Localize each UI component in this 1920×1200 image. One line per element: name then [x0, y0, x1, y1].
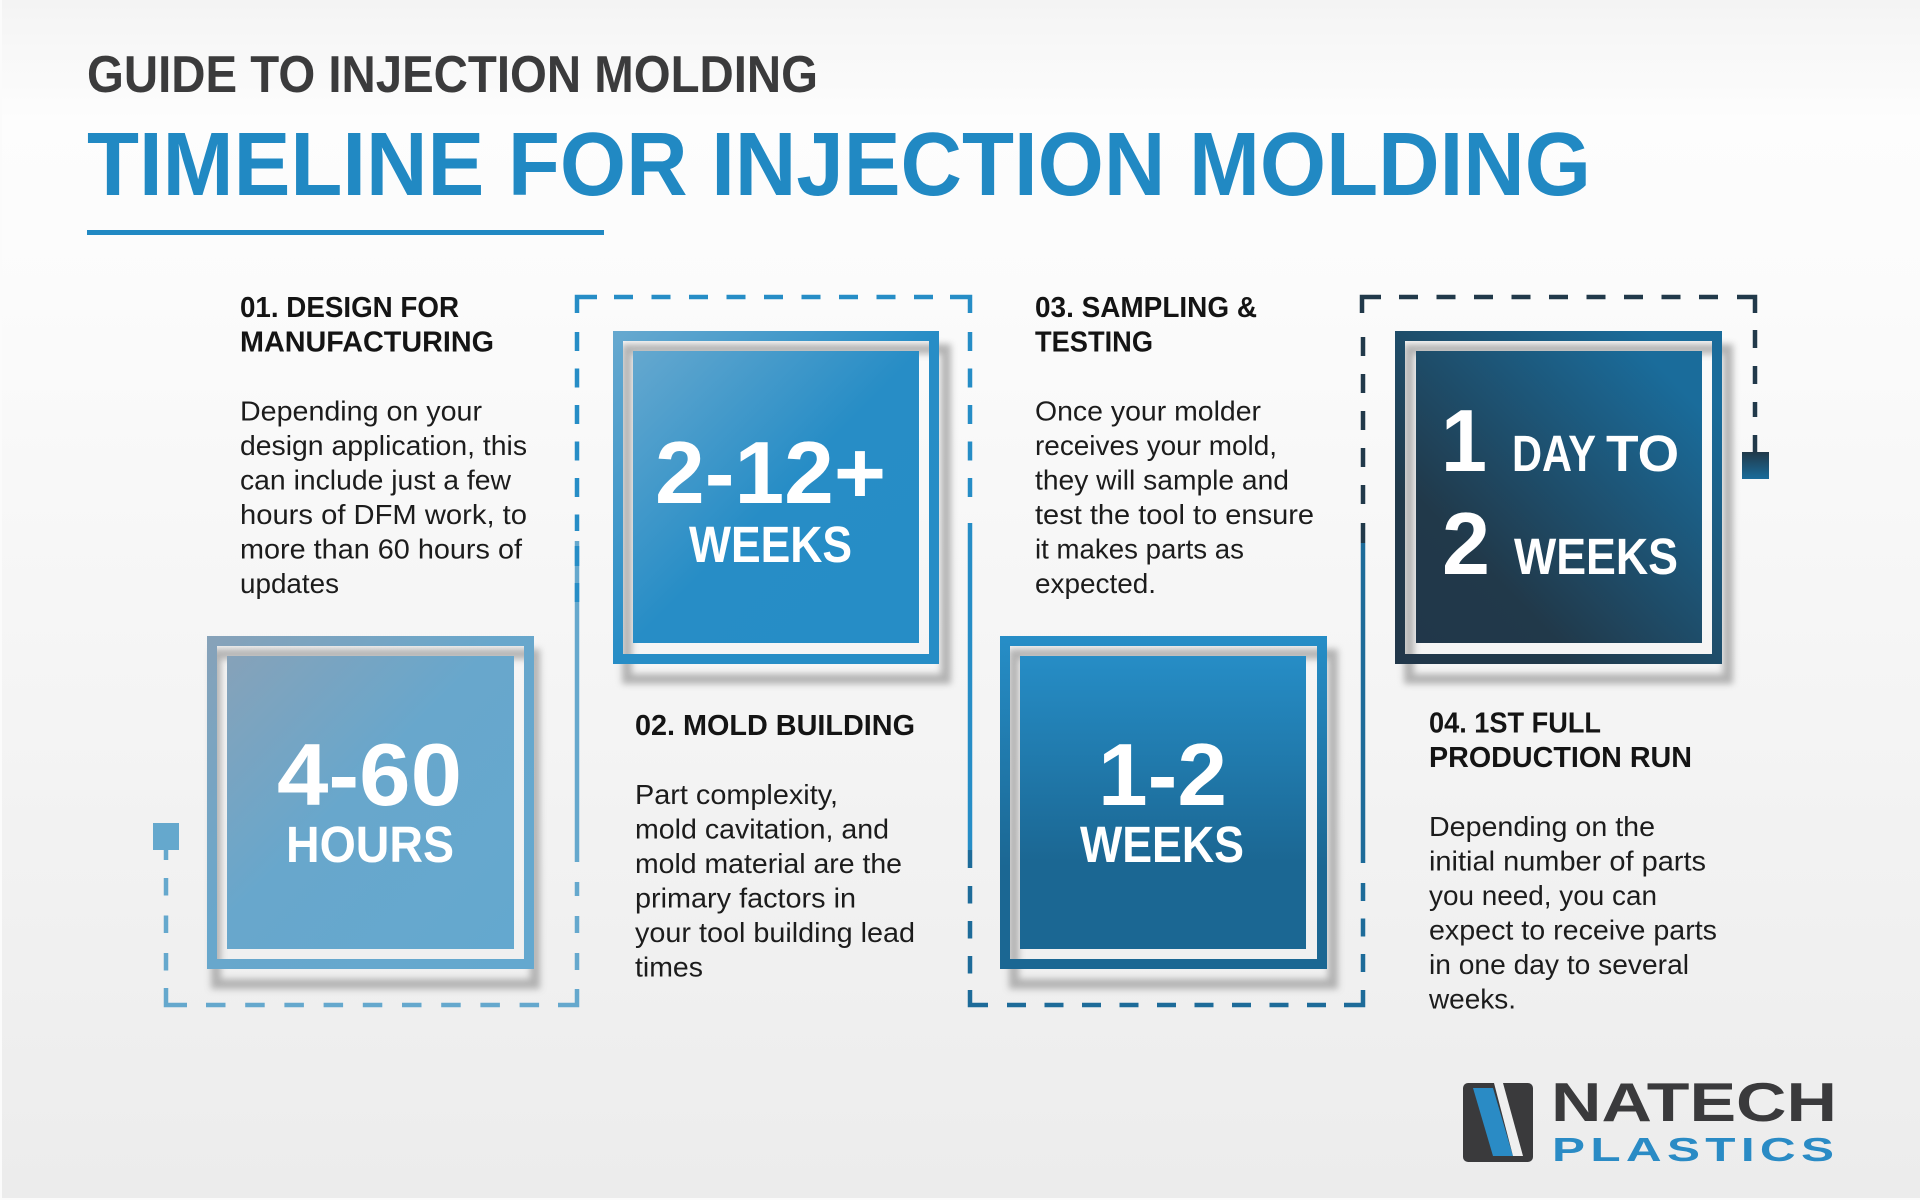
- panel: 1-2 weeks box: 1-2: [1098, 725, 1227, 824]
- panel: 04 1st full production run text: Depending on the: [1429, 811, 1655, 842]
- panel: 02 mold building text: times: [635, 952, 703, 982]
- panel: 01 design for manufacturing text: more than 60 hours of: [240, 534, 522, 564]
- panel: 03 sampling and testing text: they will sample and: [1035, 464, 1289, 496]
- title underline: [87, 230, 604, 235]
- panel: 04 1st full production run text: PRODUCTION RUN: [1429, 742, 1692, 774]
- panel: 02 mold building text: mold cavitation, and: [635, 814, 889, 844]
- panel: 1 day to 2 weeks box: WEEKS: [1514, 528, 1678, 585]
- panel: 03 sampling and testing text: 03. SAMPLING &: [1035, 292, 1257, 324]
- panel: 03 sampling and testing text: receives your mold,: [1035, 430, 1277, 461]
- panel: 04 1st full production run text: weeks.: [1428, 984, 1516, 1014]
- title: timeline for injection molding: TIMELINE FOR INJECTION MOLDING: [87, 115, 1591, 215]
- icon: logo mark: [1463, 1083, 1533, 1162]
- panel: 1 day to 2 weeks box: TO: [1606, 425, 1679, 482]
- panel: 04 1st full production run text: expect to receive parts: [1429, 914, 1717, 946]
- panel: 1-2 weeks box: WEEKS: [1080, 816, 1244, 873]
- panel: 04 1st full production run text: in one day to several: [1429, 949, 1689, 980]
- panel: 1 day to 2 weeks box: 1: [1441, 391, 1487, 490]
- panel: 03 sampling and testing text: TESTING: [1035, 326, 1153, 358]
- panel: 02 mold building text: Part complexity,: [635, 779, 838, 810]
- panel: 03 sampling and testing text: expected.: [1035, 568, 1156, 599]
- dashed timeline connector: [166, 297, 1755, 1005]
- panel: 4-60 hours box: [212, 641, 535, 984]
- panel: 1 day to 2 weeks box: DAY: [1512, 425, 1596, 482]
- panel: 03 sampling and testing text: test the tool to ensure: [1035, 499, 1314, 530]
- panel: 01 design for manufacturing text: can include just a few: [240, 464, 512, 496]
- logo: natech plastics: [1463, 1071, 1837, 1168]
- panel: 04 1st full production run text: you need, you can: [1429, 880, 1657, 911]
- panel: 1 day to 2 weeks box: [1400, 336, 1728, 679]
- panel: 02 mold building text: mold material are the: [635, 848, 902, 879]
- panel: 04 1st full production run text: initial number of parts: [1429, 846, 1706, 876]
- panel: 04 1st full production run text: [1428, 708, 1717, 1014]
- node square: end: [1742, 452, 1769, 479]
- panel: 01 design for manufacturing text: 01. DESIGN FOR: [240, 292, 459, 324]
- panel: 02 mold building text: [635, 710, 915, 982]
- heading: guide to injection molding: GUIDE TO INJECTION MOLDING: [87, 46, 818, 104]
- logo: natech plastics: PLASTICS: [1552, 1131, 1834, 1168]
- panel: 02 mold building text: 02. MOLD BUILDING: [635, 710, 915, 742]
- panel: 04 1st full production run text: 04. 1ST FULL: [1429, 708, 1601, 740]
- panel: 01 design for manufacturing text: [240, 292, 527, 599]
- panel: 01 design for manufacturing text: hours of DFM work, to: [240, 499, 527, 530]
- panel: 2-12+ weeks box: [618, 336, 946, 679]
- panel: 4-60 hours box: HOURS: [286, 816, 454, 873]
- panel: 03 sampling and testing text: Once your molder: [1035, 396, 1261, 426]
- panel: 03 sampling and testing text: it makes parts as: [1035, 534, 1244, 564]
- panel: 01 design for manufacturing text: design application, this: [240, 430, 527, 461]
- panel: 03 sampling and testing text: [1035, 292, 1314, 599]
- panel: 1-2 weeks box: [1005, 641, 1333, 984]
- logo: natech plastics: NATECH: [1551, 1071, 1837, 1133]
- node square: start: [153, 823, 179, 850]
- panel: 2-12+ weeks box: 2-12+: [655, 423, 886, 522]
- panel: 2-12+ weeks box: WEEKS: [689, 516, 852, 573]
- panel: 1 day to 2 weeks box: 2: [1442, 494, 1490, 593]
- panel: 4-60 hours box: 4-60: [277, 725, 462, 824]
- panel: 02 mold building text: your tool building lead: [635, 917, 915, 948]
- panel: 01 design for manufacturing text: updates: [240, 568, 339, 599]
- panel: 02 mold building text: primary factors in: [635, 882, 856, 914]
- panel: 01 design for manufacturing text: MANUFACTURING: [240, 326, 494, 358]
- panel: 01 design for manufacturing text: Depending on your: [240, 396, 482, 426]
